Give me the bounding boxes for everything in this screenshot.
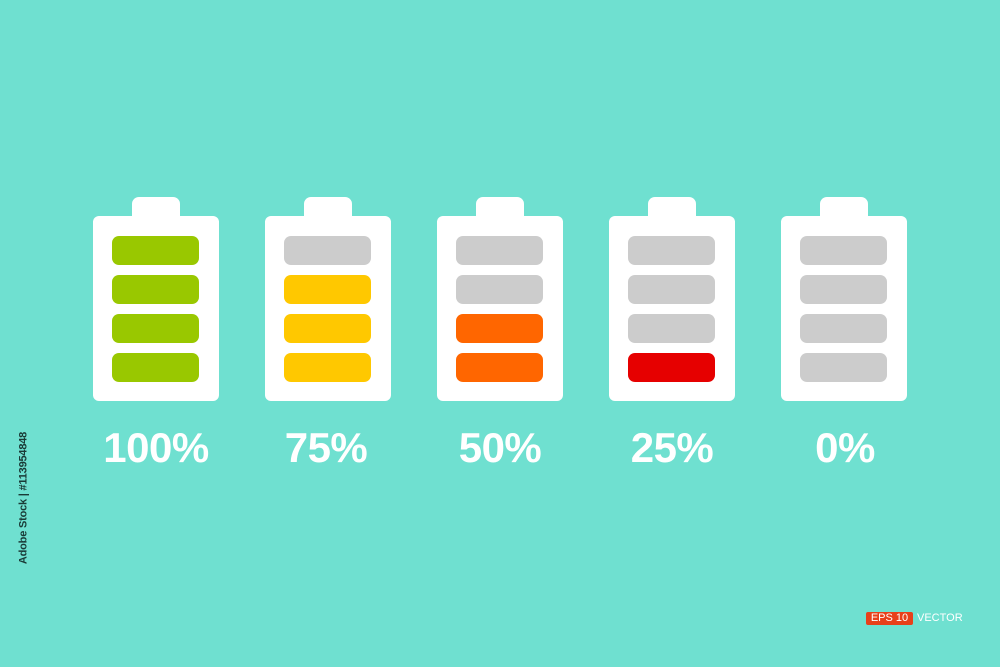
label 0%: 0% <box>815 424 875 471</box>
battery 0% <box>781 197 907 401</box>
label 25%: 25% <box>631 424 713 471</box>
battery 100% <box>93 197 219 401</box>
vertical stock id: Adobe Stock | #113954848 <box>18 432 30 564</box>
label 50%: 50% <box>459 424 541 471</box>
battery 50% <box>437 197 563 401</box>
battery 75% <box>265 197 391 401</box>
vector text: VECTOR <box>917 612 963 624</box>
label 100%: 100% <box>103 424 209 471</box>
label 75%: 75% <box>285 424 367 471</box>
battery 25% <box>609 197 735 401</box>
EPS badge: EPS 10 <box>871 612 908 624</box>
